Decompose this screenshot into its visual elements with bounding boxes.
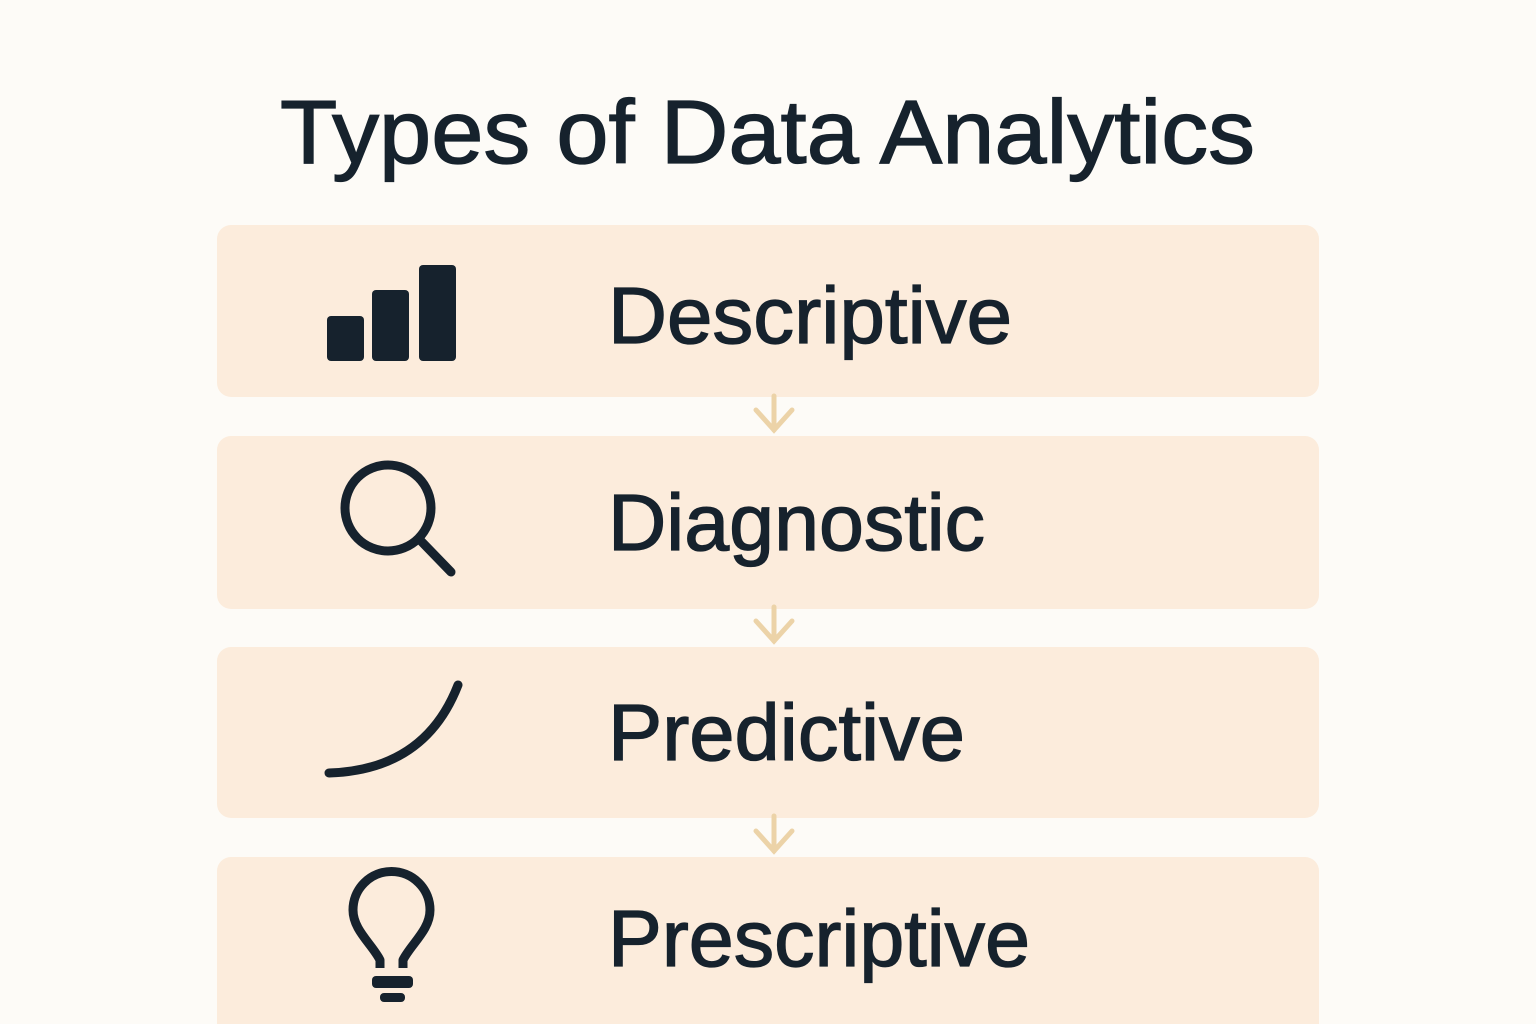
label: predictive: Predictive: [608, 688, 965, 777]
label: prescriptive: Prescriptive: [608, 894, 1030, 983]
arrow 2: [756, 607, 792, 641]
label: diagnostic: Diagnostic: [608, 478, 985, 567]
label: descriptive: Descriptive: [608, 271, 1012, 360]
panel: descriptive: [217, 225, 1319, 397]
icon: bar chart: [327, 265, 456, 361]
arrow 1: [756, 396, 792, 430]
icon: magnifier: [345, 465, 451, 572]
panel: diagnostic: [217, 436, 1319, 609]
icon: lightbulb: [353, 872, 430, 1002]
arrow 3: [756, 816, 792, 851]
panel: prescriptive: [217, 857, 1319, 1024]
panel: predictive: [217, 647, 1319, 818]
title: Types of Data Analytics: [280, 83, 1255, 183]
icon: curve: [329, 685, 458, 773]
